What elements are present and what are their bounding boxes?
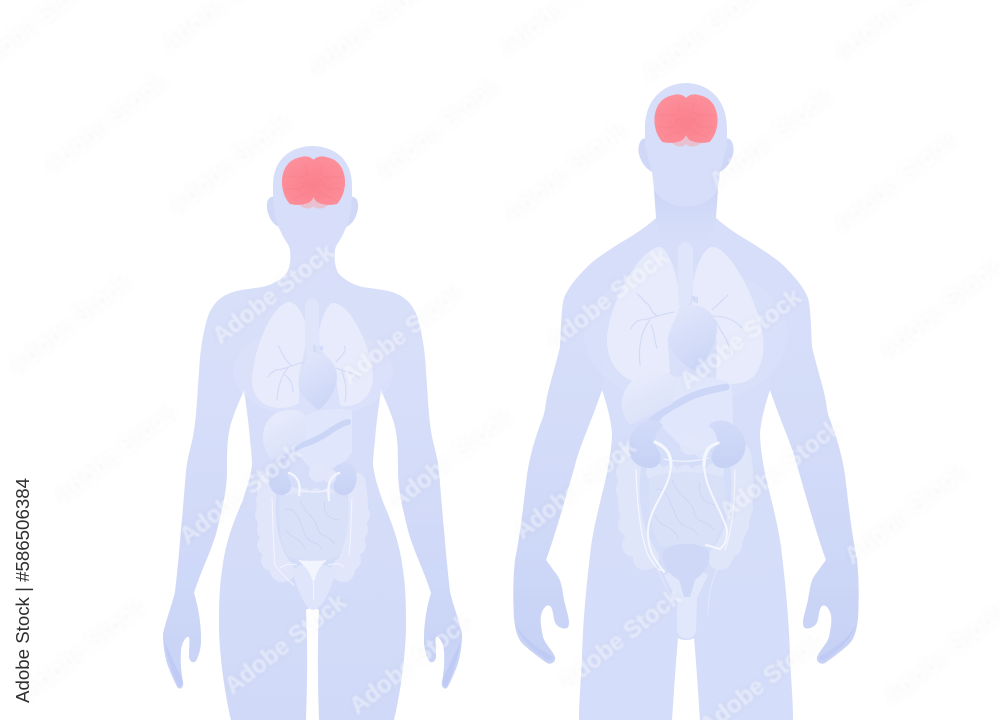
female brain	[282, 156, 345, 209]
stock id label: Adobe Stock | #586506384	[13, 478, 33, 703]
female silhouette	[163, 146, 462, 720]
female trachea	[305, 298, 319, 356]
female colon	[255, 464, 370, 582]
male liver	[622, 372, 677, 425]
female reproductive organs	[280, 560, 344, 610]
male kidneys	[628, 421, 745, 468]
male silhouette	[513, 83, 859, 720]
female stomach	[278, 409, 352, 470]
male neck shading	[654, 190, 718, 252]
male chest tint	[584, 265, 788, 405]
male figure	[513, 83, 859, 720]
male colon	[616, 435, 755, 570]
male lungs	[607, 247, 764, 384]
female heart	[298, 345, 337, 410]
male stomach	[650, 375, 733, 449]
female kidneys	[268, 463, 357, 495]
female chest tint	[233, 326, 393, 418]
female figure	[163, 146, 462, 720]
male brain	[654, 94, 718, 147]
male urinary tract	[636, 442, 735, 572]
female liver	[263, 410, 306, 460]
male bronchi	[631, 294, 742, 365]
female lungs	[252, 302, 373, 408]
female urinary tract	[272, 473, 352, 585]
male bladder and genitals	[656, 544, 717, 639]
male heart	[668, 296, 717, 371]
male trachea	[678, 242, 693, 310]
male small intestine	[649, 472, 726, 550]
female small intestine	[279, 492, 349, 560]
female bronchi	[268, 346, 360, 402]
